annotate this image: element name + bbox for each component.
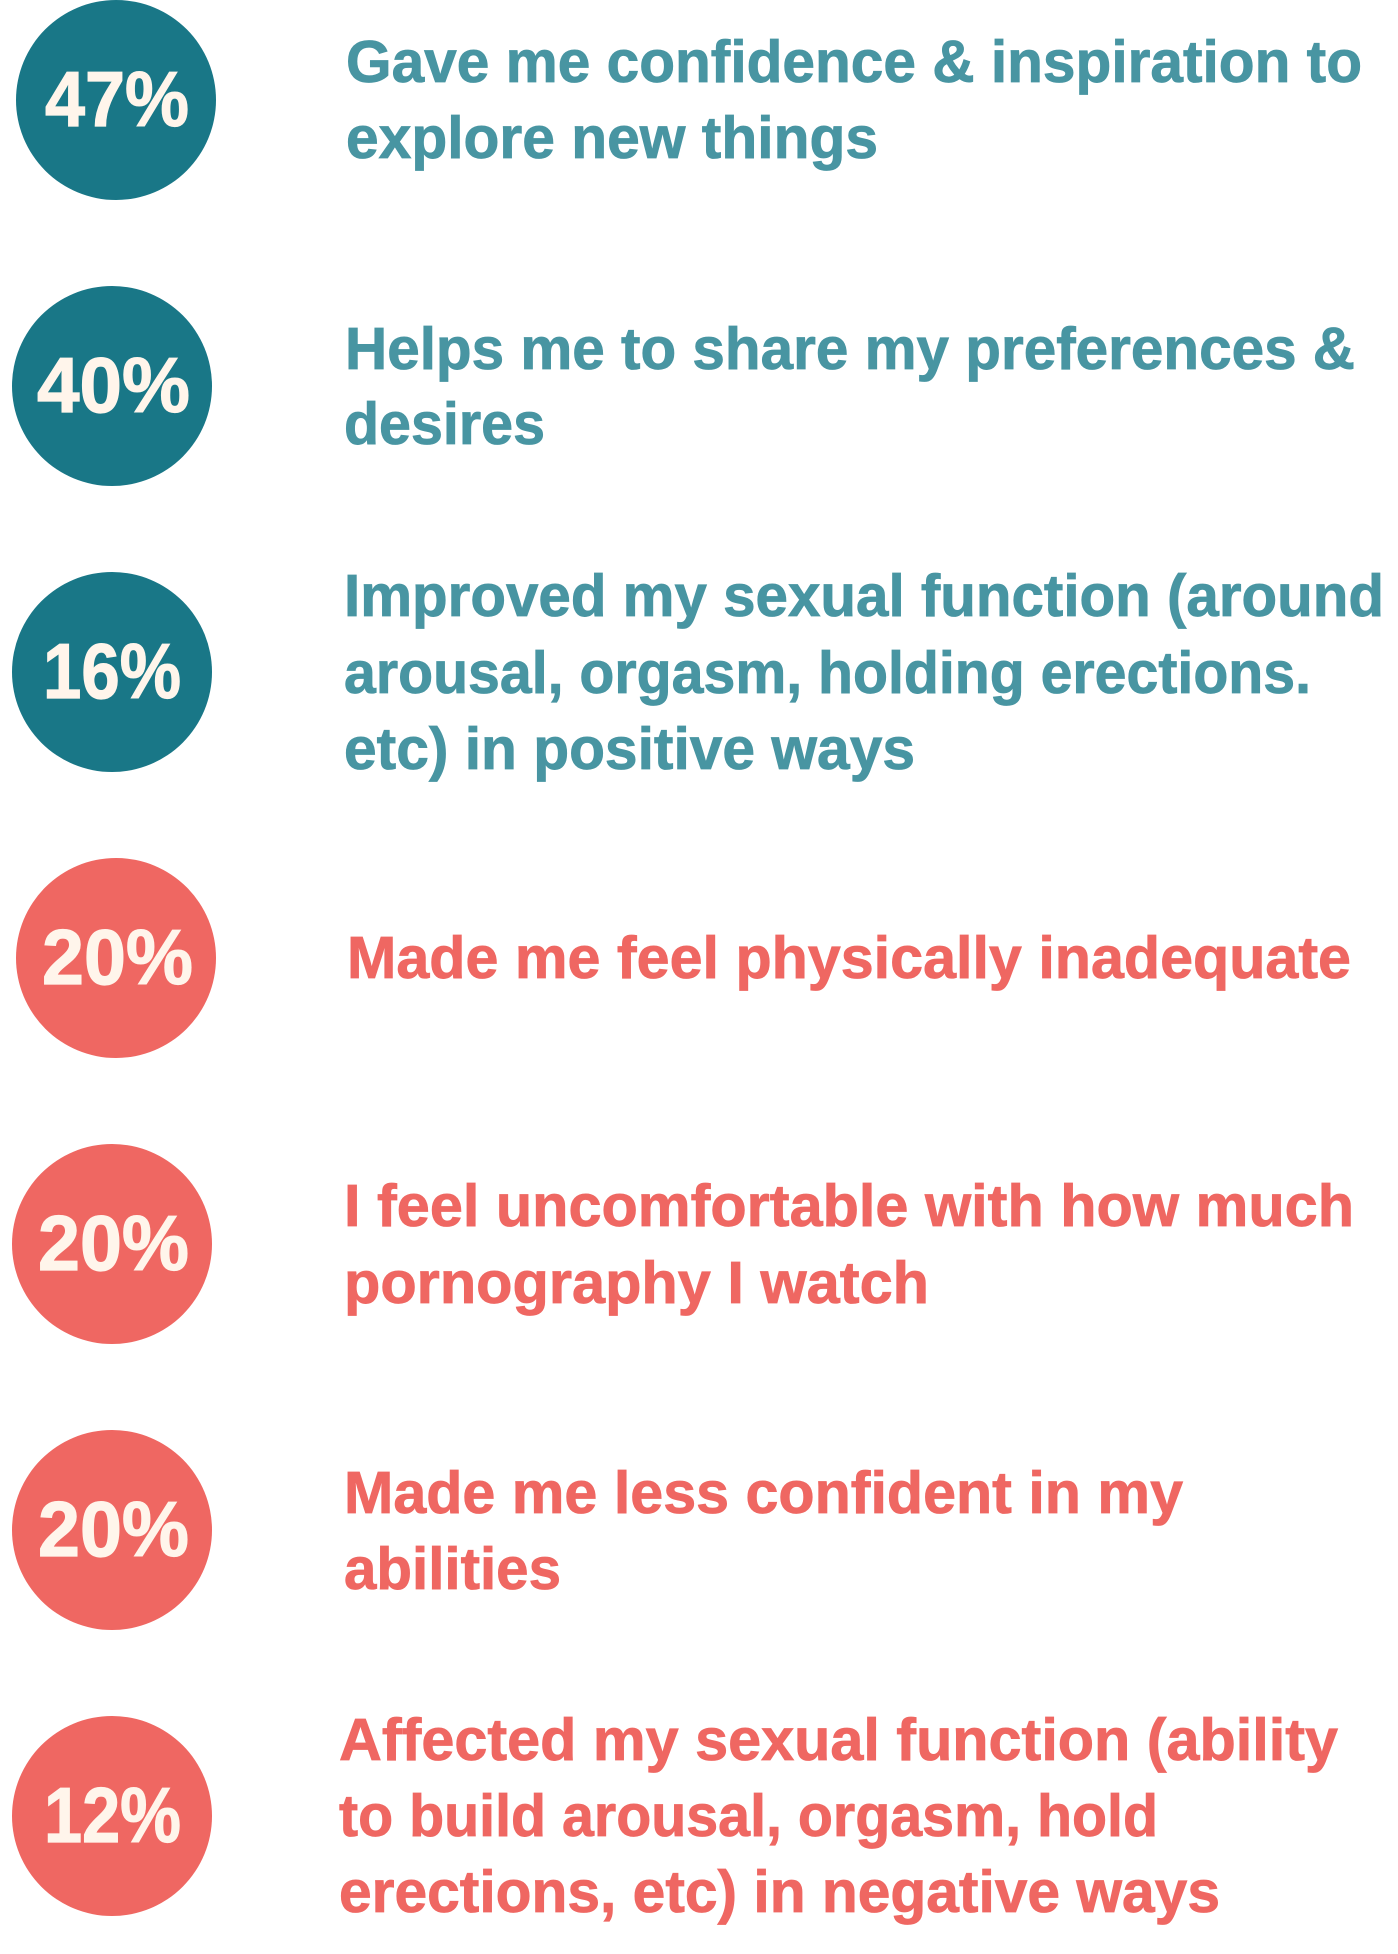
- statement: improved sexual function: etc) in positive ways: [344, 716, 915, 782]
- badge: 20%: [12, 1144, 212, 1344]
- statement: uncomfortable with how much: I feel uncomfortable with how much: [344, 1173, 1354, 1239]
- row: 12% affected sexual function: [12, 1707, 1338, 1925]
- badge: 20%: 20%: [38, 1485, 189, 1573]
- badge: 20%: [16, 858, 216, 1058]
- row: 40% share preferences: [12, 286, 1355, 486]
- badge: 16%: 16%: [43, 627, 181, 715]
- badge: 20%: 20%: [38, 1199, 189, 1287]
- statement: affected sexual function: [339, 1707, 1338, 1925]
- badge: 12%: [12, 1716, 212, 1916]
- statement: less confident in abilities: Made me less confident in my: [344, 1460, 1183, 1526]
- badge: 20%: 20%: [42, 913, 193, 1001]
- badge: 40%: [12, 286, 212, 486]
- badge: 16%: [12, 572, 212, 772]
- statement: improved sexual function: Improved my sexual function (around: [344, 563, 1384, 629]
- statement: less confident in abilities: [344, 1460, 1183, 1602]
- statement: share preferences and desires: desires: [344, 391, 545, 457]
- statement: confidence and inspiration: Gave me confidence & inspiration to: [346, 29, 1362, 95]
- statement: affected sexual function: erections, etc) in negative ways: [339, 1859, 1220, 1925]
- badge: 12%: 12%: [44, 1771, 181, 1859]
- row: 20% physically inadequate: [16, 858, 1351, 1058]
- badge: 20%: [12, 1430, 212, 1630]
- statement: uncomfortable with how much: [344, 1173, 1354, 1316]
- statement: less confident in abilities: abilities: [344, 1536, 561, 1602]
- statement: affected sexual function: Affected my sexual function (ability: [339, 1707, 1338, 1773]
- badge: 40%: 40%: [37, 341, 190, 429]
- row: 47% gave me confidence: [16, 0, 1362, 200]
- row: 20% uncomfortable: [12, 1144, 1354, 1344]
- statement: improved sexual function: [344, 563, 1384, 782]
- statement: uncomfortable with how much: pornography I watch: [344, 1250, 929, 1316]
- statement: share preferences and desires: Helps me to share my preferences &: [345, 316, 1355, 382]
- statement: physically inadequate: Made me feel physically inadequate: [347, 925, 1351, 991]
- badge: 47%: 47%: [45, 55, 189, 143]
- statement: confidence and inspiration: [346, 29, 1362, 171]
- badge: 47%: [16, 0, 216, 200]
- row: 20% less confident: [12, 1430, 1183, 1630]
- statement: improved sexual function: arousal, orgasm, holding erections.: [344, 640, 1311, 706]
- statement: affected sexual function: to build arousal, orgasm, hold: [339, 1783, 1158, 1849]
- row: 16% improved sexual function: [12, 563, 1384, 782]
- statement: share preferences and desires: [344, 316, 1355, 457]
- statement: confidence and inspiration: explore new things: [346, 105, 878, 171]
